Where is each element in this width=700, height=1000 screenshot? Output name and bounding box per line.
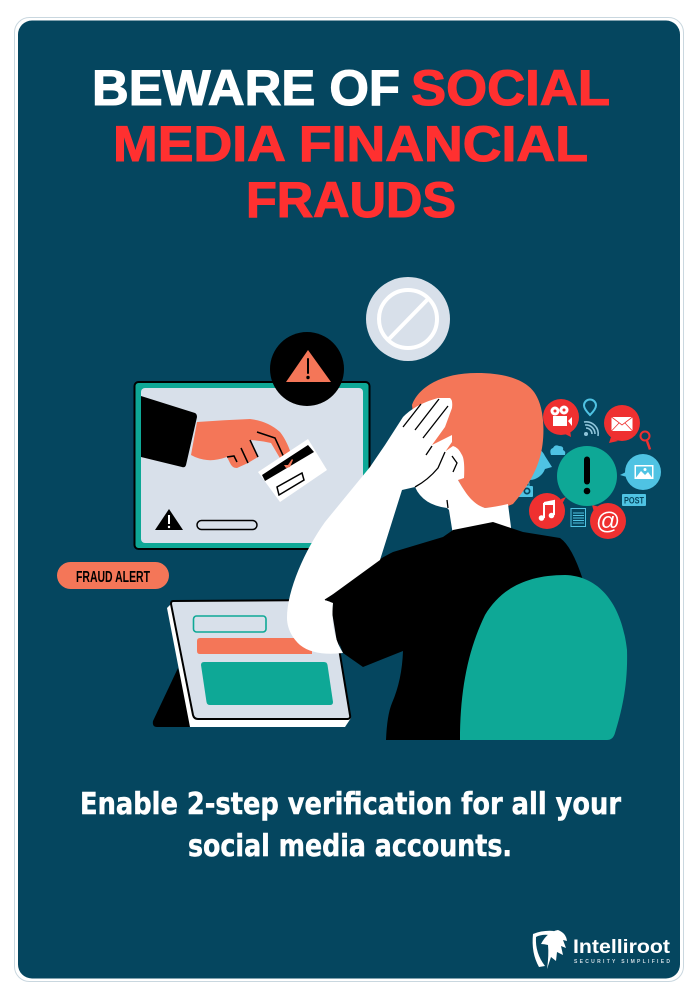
bubble: hidden blue [530, 446, 552, 480]
torso [325, 522, 600, 740]
coral button [197, 638, 312, 654]
bubble: video [543, 399, 579, 437]
logo: Intelliroot: SECURITY SIMPLIFIED [574, 959, 670, 965]
person [287, 373, 627, 740]
arm and hand [287, 398, 457, 654]
progress bar [197, 520, 257, 530]
title [92, 59, 610, 228]
icon: camera [517, 483, 533, 497]
face and neck [415, 446, 512, 535]
monitor [134, 382, 370, 549]
icon: shield with eagle [533, 930, 567, 969]
bubble: music [529, 493, 566, 529]
badge: fraud alert [57, 562, 169, 589]
bubble: at sign [590, 503, 626, 539]
icon: location pin [584, 400, 596, 415]
hand [191, 419, 293, 468]
chair [460, 575, 627, 740]
icon: warning badge [270, 332, 344, 406]
hair [412, 373, 543, 508]
logo: Intelliroot: Intelliroot [573, 937, 671, 958]
icon: cloud [550, 445, 565, 455]
icon: document [571, 508, 586, 526]
social media icons [517, 399, 661, 539]
bubble: image [620, 454, 661, 490]
title: MEDIA FINANCIAL [113, 115, 588, 172]
title: FRAUDS [246, 171, 456, 228]
icon: wifi [584, 422, 598, 436]
alert circle [557, 446, 617, 506]
icon: small warning triangle [155, 509, 183, 530]
title: BEWARE OF [92, 59, 400, 116]
label: post: POST [624, 496, 644, 506]
bubble: mail [604, 405, 640, 443]
advice text: social media accounts. [188, 829, 512, 864]
logo: Intelliroot [533, 930, 671, 969]
tablet stand [153, 668, 195, 727]
bubble: at sign: @ [596, 508, 620, 535]
icon: magnifier [640, 432, 650, 450]
icon: prohibited sign [366, 277, 450, 361]
title: SOCIAL [411, 59, 610, 116]
form field [194, 616, 266, 632]
advice text: Enable 2-step verification for all your [80, 787, 621, 822]
badge: fraud alert: FRAUD ALERT [76, 569, 150, 586]
teal content block [201, 662, 333, 705]
tablet [153, 600, 351, 727]
sleeve [141, 396, 197, 467]
credit card [258, 439, 327, 502]
advice text [80, 787, 621, 864]
